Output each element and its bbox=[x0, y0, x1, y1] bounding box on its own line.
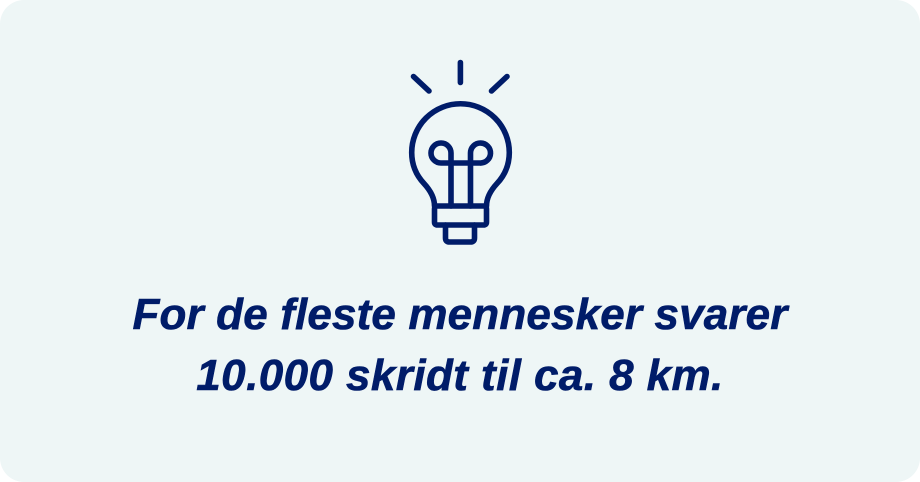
text line 1: For de fleste mennesker svarer bbox=[132, 290, 788, 339]
text line 2: 10.000 skridt til ca. 8 km. bbox=[196, 351, 724, 400]
